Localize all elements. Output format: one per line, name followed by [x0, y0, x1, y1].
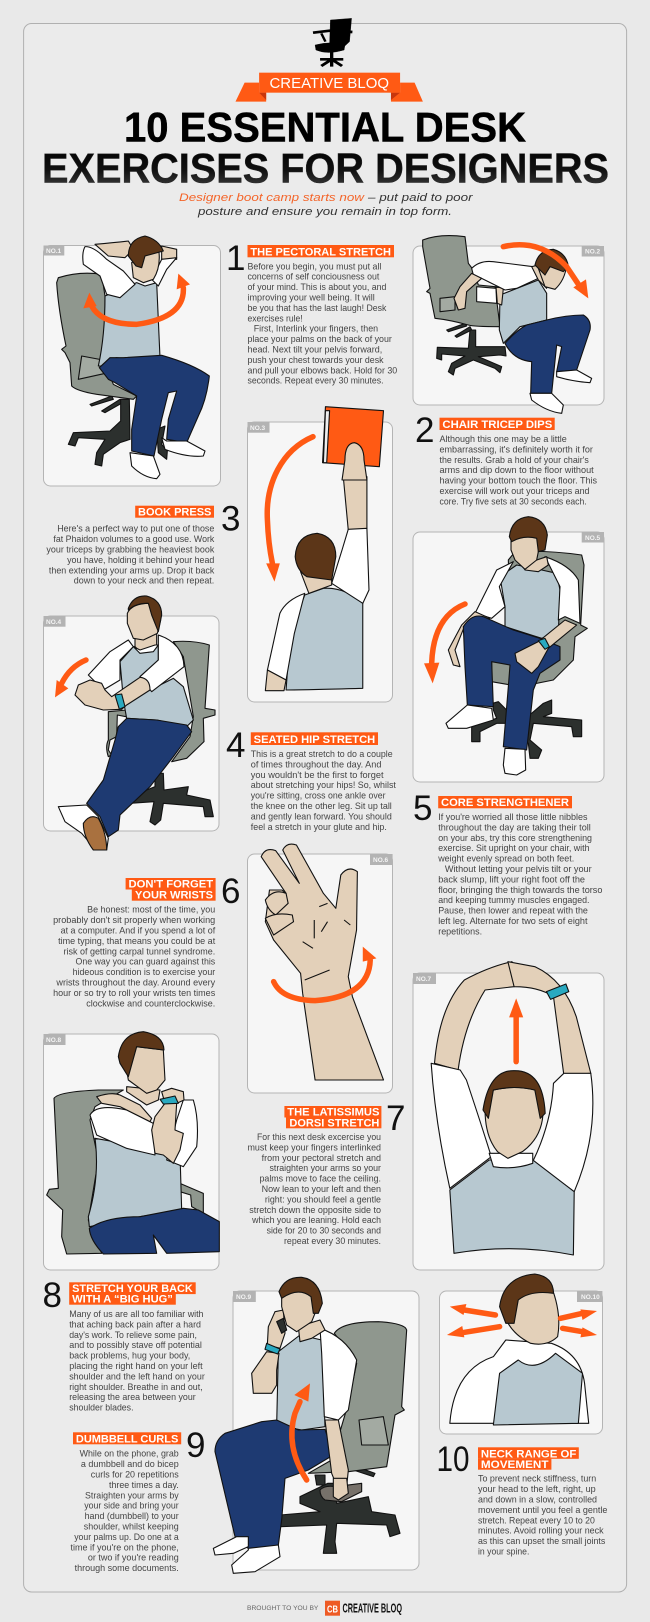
- heading: THE LATISSIMUS: [287, 1107, 379, 1119]
- arrows: neck directions: [447, 1304, 597, 1337]
- body text: [46, 524, 215, 586]
- body text: releasing the area between your: [69, 1392, 196, 1402]
- figure: neck movement: [450, 1274, 589, 1425]
- body text: back slump, lift your right foot off the: [438, 874, 585, 884]
- body text: throughout the day are taking their toll: [438, 822, 591, 832]
- body text: [440, 434, 597, 506]
- body text: embarrassing, it's definitely worth it for: [440, 444, 593, 454]
- label NO.2: NO.2: [585, 249, 601, 256]
- body text: must keep your fingers interlinked: [248, 1142, 381, 1152]
- body text: time typing, that means you could be at: [58, 936, 216, 946]
- subtitle: Designer boot camp starts now: [179, 192, 365, 204]
- number 8: 8: [42, 1276, 62, 1315]
- body text: hand (dumbbell) to your: [85, 1511, 179, 1521]
- body text: you're sitting, cross one ankle over: [251, 791, 386, 801]
- figure: core strengthener: [446, 517, 587, 775]
- arrow: rotate torso: [83, 274, 190, 324]
- heading: BOOK PRESS: [138, 507, 211, 519]
- body text: [248, 261, 397, 386]
- subtitle: – put paid to poor: [367, 192, 474, 204]
- arrow: up: [509, 998, 523, 1062]
- body text: [248, 1132, 381, 1246]
- heading: [126, 878, 216, 902]
- body text: stretch. Repeat every 10 to 20: [478, 1515, 595, 1525]
- section 8: stretch your back with a big hug: [42, 1032, 219, 1413]
- body text: [53, 905, 216, 1008]
- body text: left leg. Alternate for two sets of eight: [438, 916, 588, 926]
- heading: SEATED HIP STRETCH: [254, 734, 375, 746]
- body text: side for 20 to 30 seconds and: [267, 1226, 381, 1236]
- number 5: 5: [413, 789, 432, 828]
- body text: right: you should feel a gentle: [265, 1194, 381, 1204]
- body text: improving your well being. It will: [248, 292, 375, 302]
- body text: core. Try five sets at 30 seconds each.: [440, 496, 587, 506]
- number 1: 1: [226, 239, 245, 278]
- heading: DORSI STRETCH: [289, 1117, 379, 1129]
- number 9: 9: [186, 1426, 205, 1465]
- book: [323, 407, 383, 480]
- body text: then extending your arms up. Drop it back: [49, 565, 215, 575]
- body text: of your mind. This is about you, and: [248, 282, 386, 292]
- body text: as this can upset the small joints: [478, 1536, 606, 1546]
- footer: brought to you by: [247, 1601, 402, 1616]
- body text: shoulder and the left hand on your: [69, 1371, 205, 1381]
- card 8: [44, 1034, 219, 1270]
- logo: Creative Bloq: CB: [327, 1604, 338, 1616]
- body text: Although this one may be a little: [440, 434, 567, 444]
- heading: [69, 1282, 196, 1306]
- body text: exercise will work out your triceps and: [440, 486, 590, 496]
- body text: floor, bringing the thigh towards the torso: [438, 885, 602, 895]
- body text: the knee on the other leg. Sit up tall: [251, 801, 392, 811]
- label NO.7: [413, 973, 436, 984]
- body text: of times throughout the day. And: [251, 759, 381, 769]
- subtitle: [179, 192, 474, 218]
- body text: having your bottom touch the floor. This: [440, 476, 597, 486]
- heading: WITH A “BIG HUG”: [72, 1294, 173, 1306]
- section 1: the pectoral stretch: [44, 236, 397, 486]
- card 3: [248, 422, 392, 702]
- body text: hour or so try to roll your wrists ten times: [53, 988, 216, 998]
- body text: First, Interlink your fingers, then: [254, 324, 378, 334]
- body text: straighten your arms so your: [270, 1163, 381, 1173]
- heading: DUMBBELL CURLS: [76, 1434, 178, 1446]
- body text: you have, holding it behind your head: [67, 555, 214, 565]
- figure: hip stretch: [58, 596, 215, 850]
- section 6: don't forget your wrists: [53, 844, 393, 1093]
- body text: weight evenly spread on both feet.: [437, 854, 574, 864]
- number 7: 7: [386, 1099, 405, 1138]
- body text: your palms up. Do one at a: [74, 1532, 180, 1542]
- body text: This is a great stretch to do a couple: [251, 749, 393, 759]
- section 9: dumbbell curls: [70, 1277, 419, 1573]
- heading: DON'T FORGET: [128, 879, 213, 891]
- body text: through some documents.: [75, 1563, 179, 1573]
- body text: While on the phone, grab: [80, 1449, 179, 1459]
- body text: [437, 812, 602, 936]
- body text: time if you're on the phone,: [70, 1542, 179, 1552]
- card 10: [440, 1291, 602, 1434]
- figure: big hug: [47, 1032, 219, 1254]
- label NO.3: NO.3: [250, 425, 266, 432]
- arrow: wrist rotation: [274, 947, 376, 1001]
- body text: [70, 1449, 180, 1573]
- body text: stretch down the opposite side to: [249, 1205, 381, 1215]
- body text: movement until you feel a gentle: [478, 1505, 607, 1515]
- body text: which you are leaning. Hold each: [251, 1215, 381, 1225]
- label NO.6: NO.6: [373, 857, 389, 864]
- number 6: 6: [221, 872, 240, 911]
- heading: NECK RANGE OF: [481, 1448, 577, 1460]
- body text: Pause, then lower and repeat with the: [438, 906, 588, 916]
- number 4: 4: [226, 726, 245, 765]
- number 10: 10: [436, 1440, 470, 1479]
- body text: shoulder, whilst keeping: [84, 1521, 179, 1531]
- label NO.7: NO.7: [416, 976, 432, 983]
- banner: Creative Bloq ribbon: CREATIVE BLOQ: [270, 75, 389, 92]
- body text: repetitions.: [438, 926, 482, 936]
- body text: down to your neck and then repeat.: [74, 576, 214, 586]
- arrow: lean forward: [55, 660, 86, 697]
- title: [42, 104, 609, 192]
- number 2: 2: [415, 411, 434, 450]
- body text: One way you can guard against this: [76, 957, 216, 967]
- body text: concerns of self conciousness out: [248, 272, 380, 282]
- body text: your side and bring your: [84, 1501, 179, 1511]
- label NO.3: [248, 422, 270, 433]
- body text: curls for 20 repetitions: [91, 1469, 179, 1479]
- body text: Now lean to your left and then: [262, 1184, 381, 1194]
- body text: place your palms on the back of your: [248, 334, 392, 344]
- section 5: core strengthener: [413, 517, 604, 936]
- footer: brought to you by: BROUGHT TO YOU BY: [247, 1605, 319, 1612]
- label NO.9: NO.9: [236, 1294, 252, 1301]
- body text: feel a stretch in your glute and hip.: [251, 822, 387, 832]
- figure: hand: [261, 844, 383, 1080]
- body text: and keeping tummy muscles engaged.: [438, 895, 590, 905]
- label NO.5: [582, 532, 604, 542]
- body text: about stretching your hips! So, whilst: [251, 780, 396, 790]
- body text: and pull your elbows back. Hold for 30: [248, 365, 397, 375]
- card 9: [233, 1291, 419, 1570]
- label NO.1: NO.1: [46, 248, 62, 255]
- label NO.10: NO.10: [581, 1294, 600, 1301]
- heading: [478, 1447, 579, 1471]
- arrow: raise knee: [424, 604, 465, 683]
- section 7: the latissimus dorsi stretch: [248, 962, 604, 1270]
- arrow: curl up: [292, 1383, 310, 1480]
- body text: push your chest towards your desk: [248, 355, 384, 365]
- banner: Creative Bloq ribbon: [235, 73, 423, 102]
- body text: and gently lean forward. You should: [251, 811, 392, 821]
- body text: minutes. Avoid rolling your neck: [478, 1526, 604, 1536]
- label NO.1: [44, 246, 64, 256]
- label NO.4: NO.4: [46, 619, 62, 626]
- figure: tricep dips: [423, 236, 592, 413]
- card 1: [44, 246, 220, 486]
- heading: THE PECTORAL STRETCH: [250, 246, 391, 258]
- body text: risk of getting carpal tunnel syndrome.: [64, 946, 215, 956]
- body text: arms and dip down to the floor without: [440, 465, 594, 475]
- body text: [478, 1474, 607, 1556]
- body text: a dumbbell and do bicep: [81, 1459, 179, 1469]
- figure: dumbbell curls: [213, 1277, 407, 1573]
- body text: right shoulder. Breathe in and out,: [69, 1382, 203, 1392]
- body text: or two if you're reading: [88, 1553, 179, 1563]
- body text: hideous condition is to exercise your: [73, 967, 215, 977]
- heading: [284, 1106, 381, 1129]
- body text: back problems, hug your body,: [69, 1351, 190, 1361]
- heading: STRETCH YOUR BACK: [72, 1283, 193, 1295]
- label NO.8: [44, 1034, 66, 1045]
- body text: To prevent neck stiffness, turn: [478, 1474, 596, 1484]
- label NO.4: [44, 616, 66, 627]
- label NO.8: NO.8: [46, 1037, 62, 1044]
- arrow: dip down: [503, 245, 588, 298]
- body text: clockwise and counterclockwise.: [86, 998, 215, 1008]
- body text: If you're worried all those little nibbles: [438, 812, 588, 822]
- body text: Without letting your pelvis tilt or your: [445, 864, 592, 874]
- body text: exercise. Sit upright on your chair, with: [438, 843, 590, 853]
- subtitle: posture and ensure you remain in top form.: [197, 206, 452, 218]
- label NO.5: NO.5: [585, 535, 601, 542]
- heading: CORE STRENGTHENER: [441, 797, 569, 809]
- card 5: [413, 532, 604, 782]
- heading: YOUR WRISTS: [135, 890, 213, 902]
- body text: be you that has the last laugh! Desk: [248, 303, 387, 313]
- body text: in your spine.: [478, 1546, 529, 1556]
- figure: pectoral stretch: [57, 236, 209, 479]
- body text: Here's a perfect way to put one of those: [57, 524, 214, 534]
- body text: at a computer. And if you spend a lot of: [61, 926, 216, 936]
- body text: your triceps by grabbing the heaviest book: [46, 545, 215, 555]
- body text: Many of us are all too familiar with: [69, 1309, 204, 1319]
- card 4: [44, 616, 219, 831]
- section 3: book press: [46, 407, 392, 702]
- body text: on your abs, try this core strengthening: [438, 833, 592, 843]
- figure: book press: [265, 477, 369, 691]
- card 7: [413, 973, 604, 1270]
- body text: wrists throughout the day. Around every: [55, 978, 216, 988]
- body text: you wouldn't be the first to forget: [251, 770, 384, 780]
- section 2: chair tricep dips: [413, 236, 604, 506]
- section 4: seated hip stretch: [44, 596, 396, 850]
- body text: fat Phaidon volumes to a good use. Work: [53, 534, 215, 544]
- heading: CHAIR TRICEP DIPS: [442, 419, 552, 431]
- logo: Creative Bloq: CREATIVE BLOQ: [342, 1601, 402, 1616]
- body text: from your pectoral stretch and: [262, 1153, 381, 1163]
- label NO.9: [233, 1291, 256, 1302]
- body text: [69, 1309, 205, 1413]
- body text: and down in a slow, controlled: [478, 1494, 597, 1504]
- body text: seconds. Repeat every 30 minutes.: [248, 376, 384, 386]
- body text: head. Next tilt your pelvis forward,: [248, 344, 382, 354]
- body text: repeat every 30 minutes.: [284, 1236, 381, 1246]
- body text: three times a day.: [109, 1480, 179, 1490]
- body text: day's work. To relieve some pain,: [69, 1330, 197, 1340]
- section 10: neck range of movement: [436, 1274, 607, 1556]
- label NO.6: [370, 854, 393, 865]
- heading: MOVEMENT: [481, 1459, 549, 1471]
- body text: Before you begin, you must put all: [248, 261, 381, 271]
- body text: exercises rule!: [248, 313, 303, 323]
- body text: palms move to face the ceiling.: [260, 1174, 381, 1184]
- body text: Straighten your arms by: [85, 1490, 179, 1500]
- body text: the results. Grab a hold of your chair's: [440, 455, 589, 465]
- body text: your head to the left, right, up: [478, 1484, 596, 1494]
- body text: Be honest: most of the time, you: [87, 905, 215, 915]
- title: EXERCISES FOR DESIGNERS: [42, 144, 609, 192]
- label NO.10: [577, 1291, 602, 1302]
- figure: latissimus stretch: [431, 962, 593, 1255]
- body text: placing the right hand on your left: [69, 1361, 203, 1371]
- body text: probably don't sit properly when working: [53, 915, 215, 925]
- title: 10 ESSENTIAL DESK: [124, 104, 526, 150]
- card 6: [248, 854, 392, 1093]
- body text: shoulder blades.: [69, 1403, 134, 1413]
- label NO.2: [582, 246, 604, 256]
- arrow: lower book: [266, 437, 313, 582]
- body text: [251, 749, 396, 832]
- body text: For this next desk excercise you: [257, 1132, 381, 1142]
- card 2: [413, 246, 604, 405]
- body text: that aching back pain after a hard: [69, 1319, 201, 1329]
- number 3: 3: [221, 500, 240, 538]
- logo: Creative Bloq: [325, 1601, 402, 1616]
- body text: and to possibly stave off potential: [69, 1340, 202, 1350]
- icon: office chair silhouette: [313, 18, 352, 67]
